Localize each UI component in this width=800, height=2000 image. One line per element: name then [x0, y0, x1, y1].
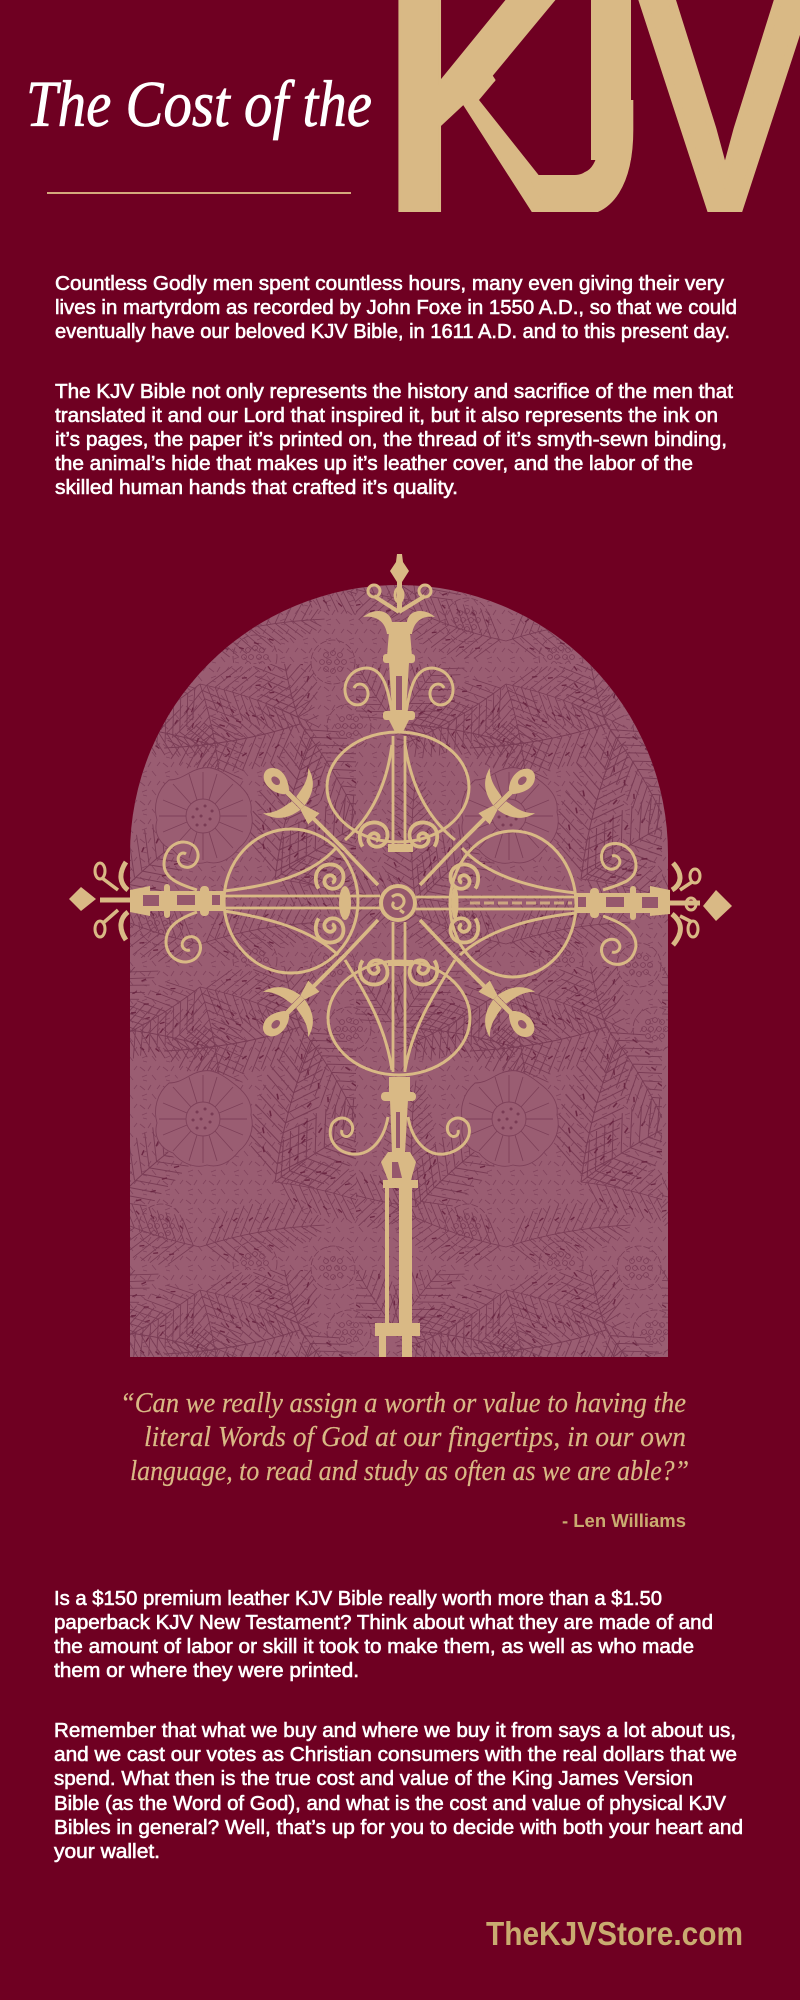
body paragraph 3: the amount of labor or skill it took to make them, as well as who made [54, 1636, 694, 1658]
intro paragraph 2: The KJV Bible not only represents the history and sacrifice of the men that [55, 381, 733, 403]
body paragraph 3: Is a $150 premium leather KJV Bible really worth more than a $1.50 [54, 1588, 662, 1610]
body paragraph 3: paperback KJV New Testament? Think about what they are made of and [54, 1612, 713, 1634]
lower scrolls and stem [330, 1077, 469, 1357]
intro paragraph 2: translated it and our Lord that inspired it, but it also represents the ink on [55, 405, 718, 427]
pull quote: language, to read and study as often as we are able?” [130, 1455, 689, 1487]
intro paragraph 2 [55, 381, 733, 499]
intro paragraph 1: Countless Godly men spent countless hours, many even giving their very [55, 273, 724, 295]
panel: patterned arch [130, 585, 668, 1357]
intro paragraph 2: it’s pages, the paper it’s printed on, the thread of it’s smyth-sewn binding, [55, 429, 727, 451]
body paragraph 4: and we cast our votes as Christian consumers with the real dollars that we [54, 1744, 737, 1766]
top finial [363, 554, 435, 732]
title: The Cost of the: The Cost of the [26, 68, 372, 141]
central medallion [339, 886, 458, 920]
left arm [69, 842, 224, 962]
intro paragraph 2: skilled human hands that crafted it’s quality. [55, 477, 458, 499]
title divider rule [47, 192, 351, 194]
body paragraph 3: them or where they were printed. [54, 1660, 359, 1682]
intro paragraph 1: lives in martyrdom as recorded by John Foxe in 1550 A.D., so that we could [55, 297, 737, 319]
quote attribution: - Len Williams [562, 1511, 686, 1531]
intro paragraph 1 [55, 273, 737, 343]
intro paragraph 1: eventually have our beloved KJV Bible, in 1611 A.D. and to this present day. [55, 321, 730, 343]
upper scrolls [345, 668, 453, 712]
pull quote: literal Words of God at our fingertips, in our own [144, 1421, 686, 1453]
website footer: TheKJVStore.com [486, 1915, 743, 1952]
body paragraph 4: Remember that what we buy and where we buy it from says a lot about us, [54, 1720, 736, 1742]
pull quote: “Can we really assign a worth or value to having the [120, 1387, 686, 1419]
right arm [576, 843, 732, 964]
body paragraph 4: spend. What then is the true cost and value of the King James Version [54, 1768, 693, 1790]
inner small scrolls [316, 822, 478, 985]
body paragraph 4: Bibles in general? Well, that’s up for you to decide with both your heart and [54, 1817, 743, 1839]
inner curved lens lines [224, 745, 576, 1070]
intro paragraph 2: the animal’s hide that makes up it’s leather cover, and the labor of the [55, 453, 693, 475]
pull quote [120, 1387, 689, 1487]
four ellipses [224, 732, 576, 1075]
body paragraph 3 [54, 1588, 713, 1682]
body paragraph 4: your wallet. [54, 1841, 160, 1863]
body paragraph 4 [54, 1720, 743, 1863]
central bars [224, 736, 576, 1072]
diagonal buds [243, 748, 555, 1057]
icon: ornamental gold cross [69, 554, 732, 1357]
title: KJV large letters [398, 0, 800, 212]
body paragraph 4: Bible (as the Word of God), and what is the cost and value of physical KJV [54, 1793, 727, 1815]
